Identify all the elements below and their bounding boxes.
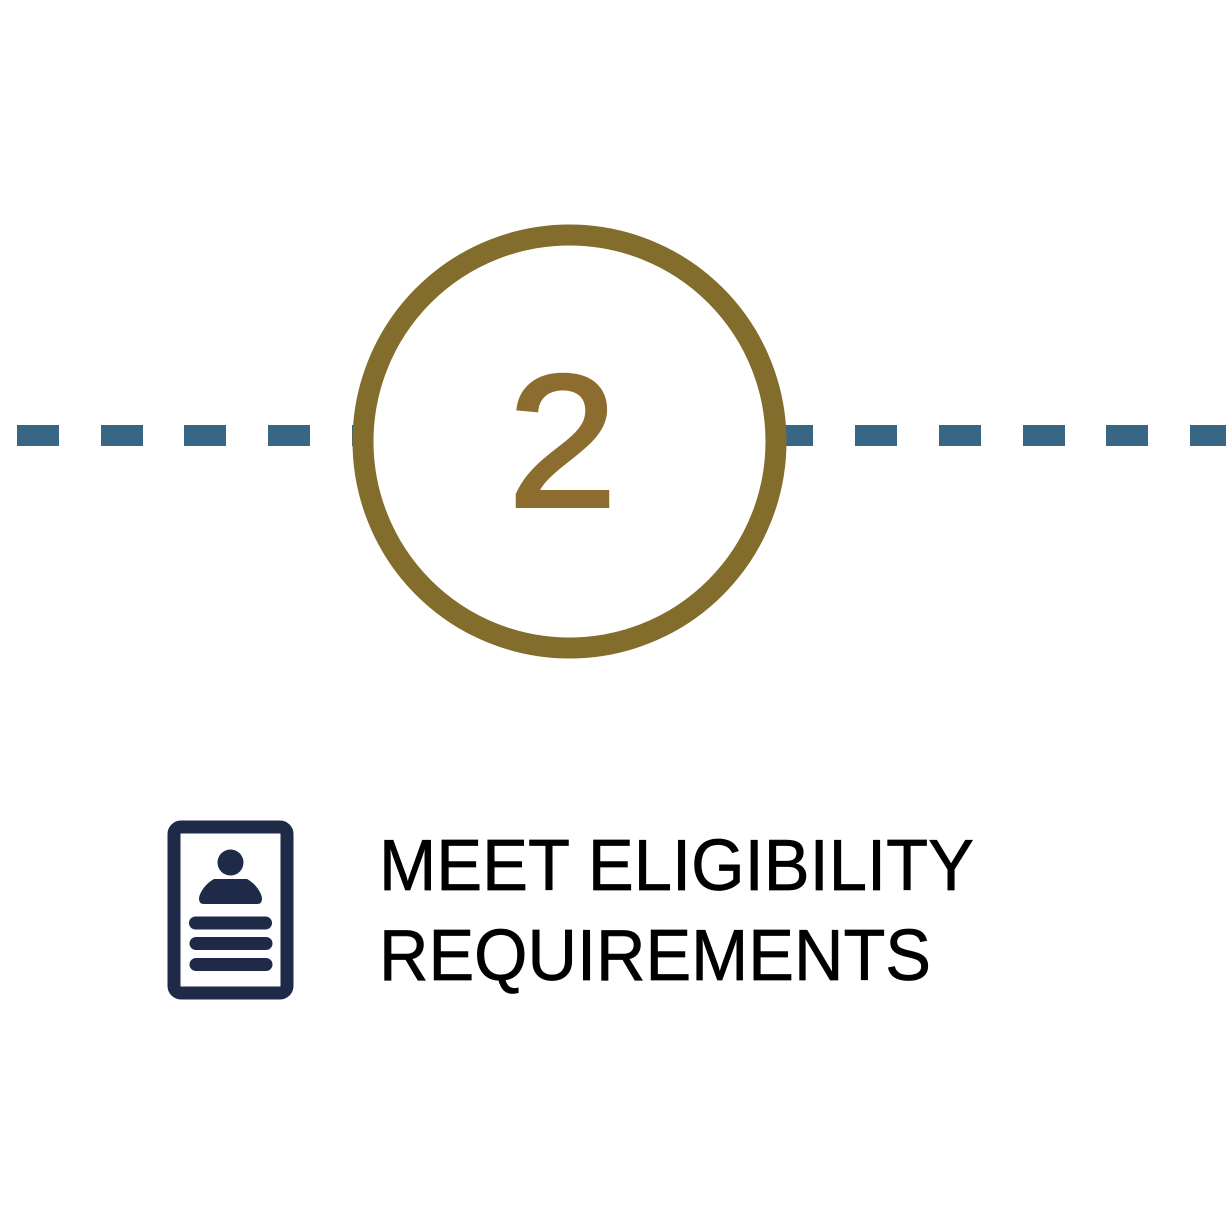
- step number circle: [363, 235, 776, 648]
- step number: 2: [508, 336, 617, 546]
- heading: REQUIREMENTS: [379, 916, 931, 996]
- heading: [379, 826, 974, 996]
- icon: identity document: [174, 827, 287, 993]
- heading: MEET ELIGIBILITY: [379, 826, 974, 906]
- dashed timeline: [17, 425, 1226, 446]
